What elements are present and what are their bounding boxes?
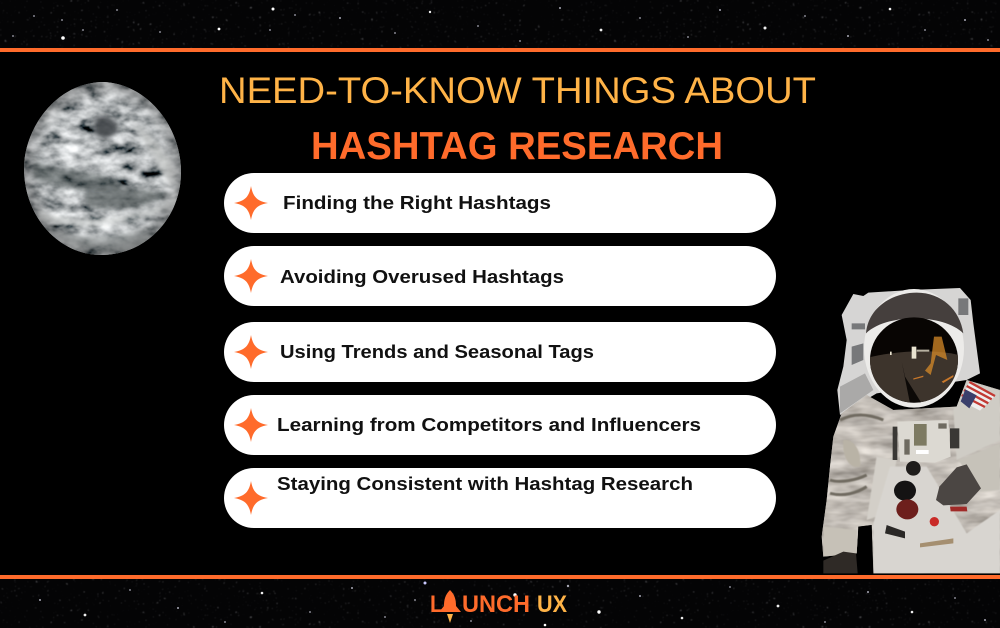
item 2 text: Avoiding Overused Hashtags: [280, 266, 564, 287]
title line 1: NEED-TO-KNOW THINGS ABOUT: [219, 70, 816, 111]
astronaut: [820, 288, 1000, 575]
earth image: [24, 82, 181, 255]
star icon 1: [234, 186, 268, 220]
visor: [869, 317, 959, 403]
list item 2: [224, 246, 776, 306]
helmet: [864, 289, 964, 408]
title line 2: HASHTAG RESEARCH: [311, 125, 723, 168]
item 3 text: Using Trends and Seasonal Tags: [280, 341, 594, 362]
item 4 text: Learning from Competitors and Influencers: [277, 414, 701, 435]
top orange rule: [0, 48, 1000, 52]
logo: LaunchUX: [430, 590, 567, 623]
star icon 2: [234, 259, 268, 293]
star icon 3: [234, 335, 268, 369]
starfield: bottom band: [0, 579, 1000, 628]
left glove: [823, 552, 858, 573]
list item 5: [224, 468, 776, 528]
item 1 text: Finding the Right Hashtags: [283, 192, 551, 213]
bottom orange rule: [0, 575, 1000, 579]
logo: LaunchUX: L: [430, 591, 443, 618]
logo: LaunchUX: UNCH: [462, 591, 530, 618]
rocket icon: [439, 590, 461, 623]
flag patch: [961, 382, 995, 411]
right glove: [936, 464, 981, 505]
logo: LaunchUX: UX: [537, 591, 567, 618]
suit torso and arms: [820, 378, 1000, 575]
chest control unit: [893, 420, 959, 463]
star icon 5: [234, 481, 268, 515]
list item 1: [224, 173, 776, 233]
black gap under arm: [858, 525, 873, 573]
backpack: [837, 288, 980, 415]
chest hoses and knobs: [894, 461, 967, 526]
item 5 text: Staying Consistent with Hashtag Research: [277, 473, 693, 494]
star icon 4: [234, 408, 268, 442]
starfield: top band: [0, 0, 1000, 48]
list item 3: [224, 322, 776, 382]
list item 4: [224, 395, 776, 455]
